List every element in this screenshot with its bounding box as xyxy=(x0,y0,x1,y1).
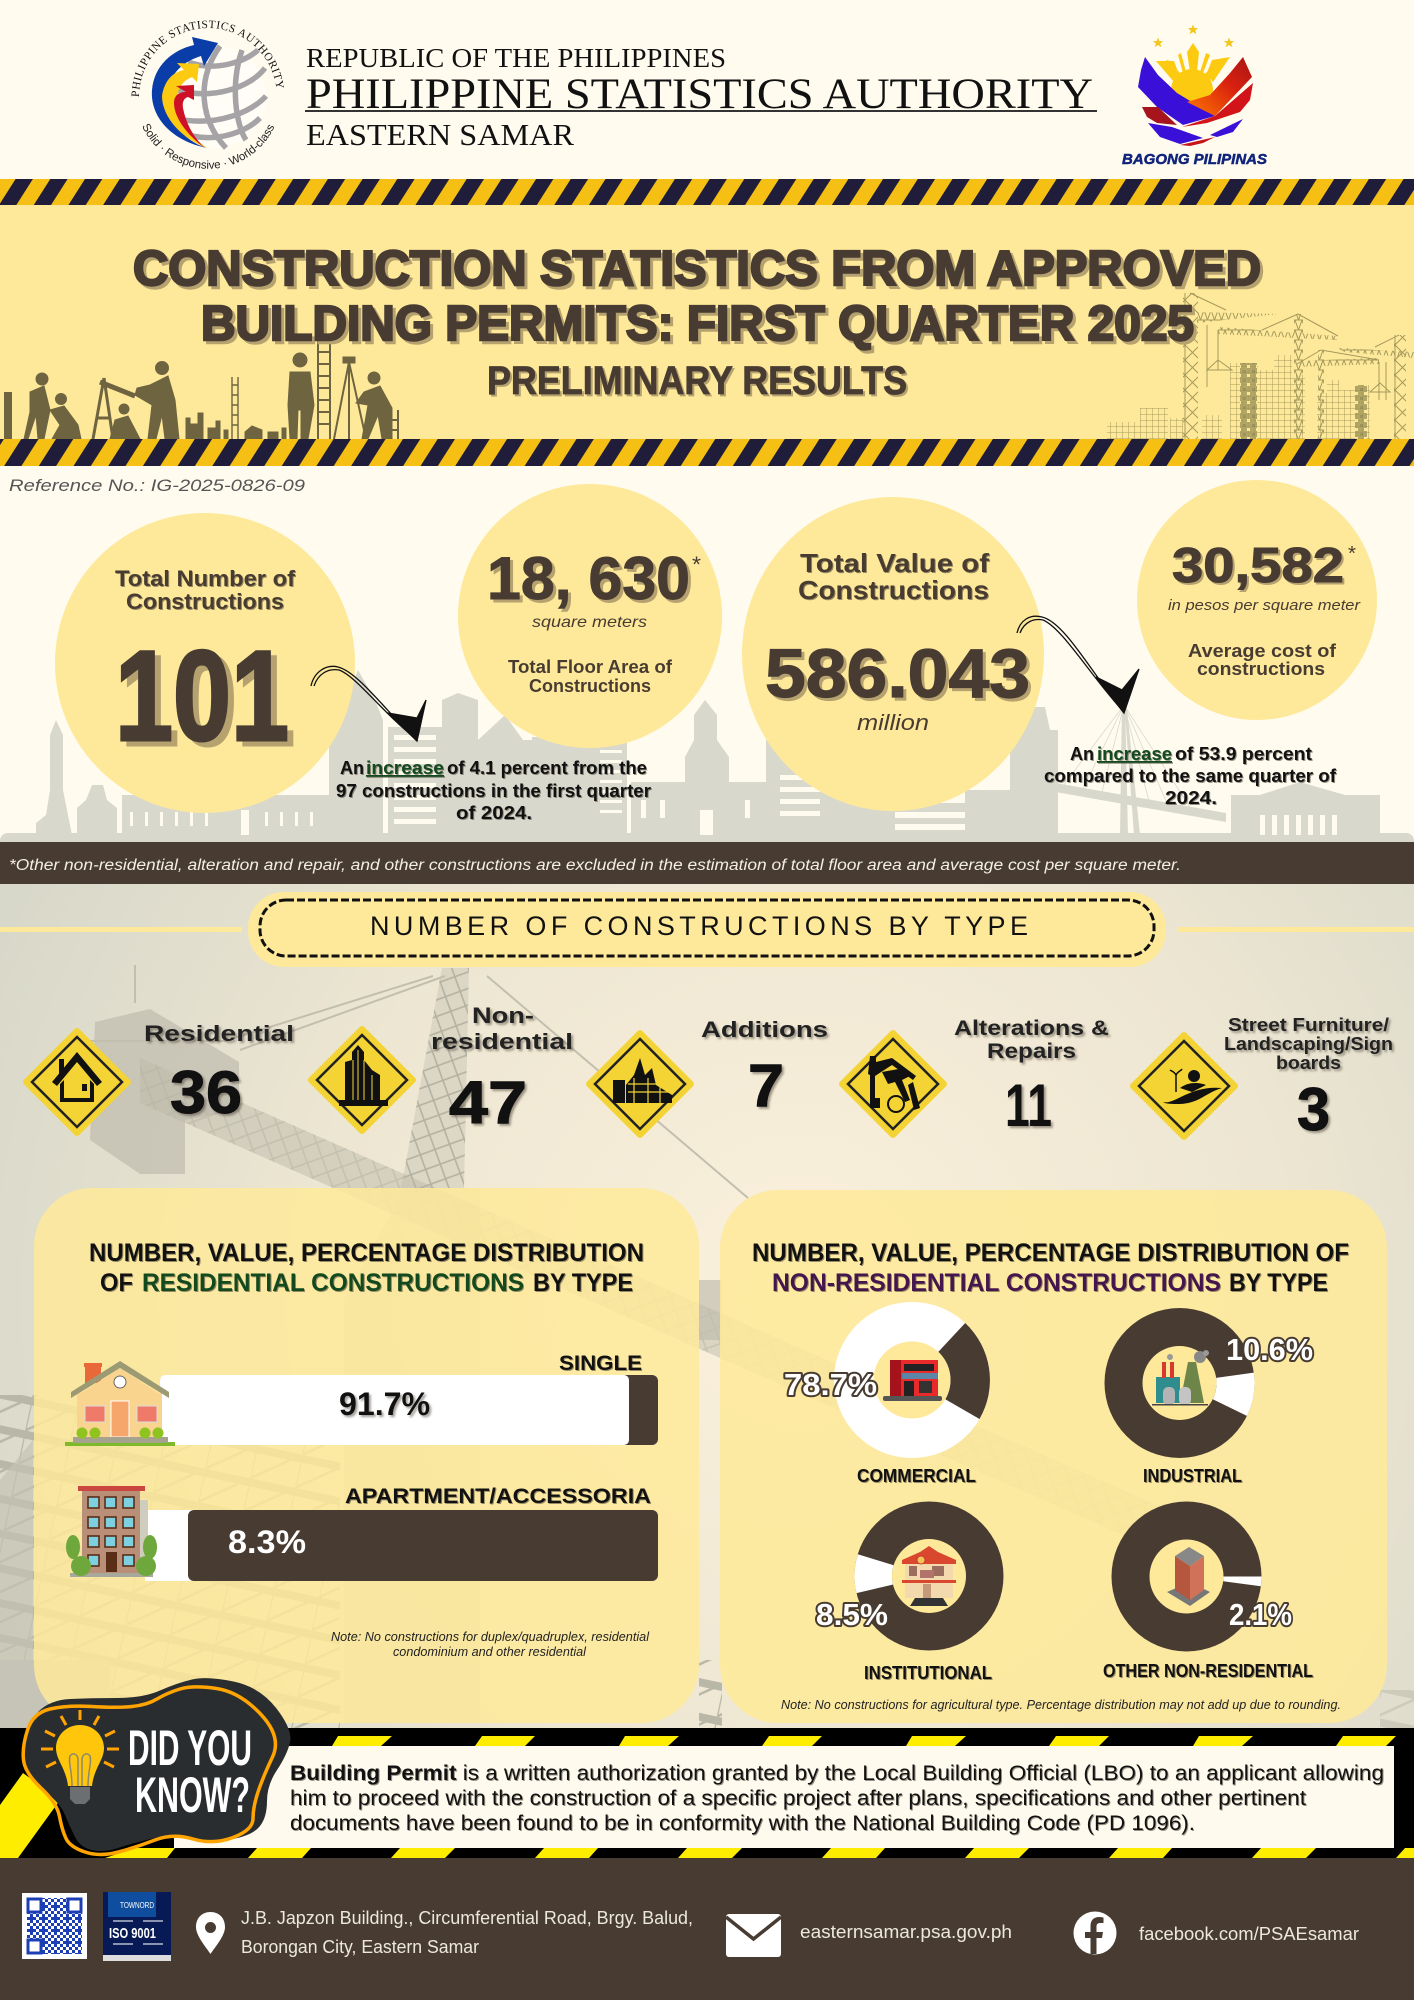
header: agency text xyxy=(305,43,1097,152)
note: residential xyxy=(331,1630,650,1659)
reference number: Reference No.: IG-2025-0826-09 xyxy=(9,476,306,495)
type: non-residential xyxy=(311,1003,573,1136)
ISO 9001 badge: ISO 9001 xyxy=(109,1925,156,1942)
header: agency text: REPUBLIC OF THE PHILIPPINES xyxy=(306,43,726,73)
callout: number increase: 97 constructions in the first quarter xyxy=(336,781,651,801)
stat circle: total number of constructions: Total Number of xyxy=(115,566,296,591)
donut: other non-residential: OTHER NON-RESIDENTIAL xyxy=(1103,1661,1313,1681)
did you know text xyxy=(128,1720,252,1823)
bar: single 91.7 percent xyxy=(160,1375,658,1445)
type: alterations and repairs: Repairs xyxy=(987,1040,1076,1063)
did you know band xyxy=(0,1728,1414,1858)
heading: non-residential: BY TYPE xyxy=(1229,1269,1328,1297)
banner art: tower cranes and buildings xyxy=(1107,293,1414,439)
icon: workers on scaffold diamond xyxy=(589,1033,691,1135)
stat circle: total value of constructions: Total Value of xyxy=(800,548,989,578)
stat circle: total floor area: * xyxy=(692,552,701,577)
icon: apartment building xyxy=(66,1486,157,1577)
donut: institutional: 8.5% xyxy=(816,1597,888,1632)
type: street furniture: Landscaping/Sign xyxy=(1224,1034,1393,1054)
type: alterations and repairs: 11 xyxy=(1005,1072,1052,1139)
hazard tape bottom xyxy=(0,439,1414,466)
heading: residential xyxy=(89,1239,644,1297)
callout: number increase: of 4.1 percent from the xyxy=(447,758,647,778)
banner art: construction workers silhouette xyxy=(4,340,398,439)
header: agency text: EASTERN SAMAR xyxy=(306,117,574,152)
stat circle: average cost: Average cost of xyxy=(1188,641,1337,661)
stat circle: average cost: in pesos per square meter xyxy=(1168,597,1361,614)
donut: commercial xyxy=(784,1302,990,1486)
heading: non-residential: NON-RESIDENTIAL CONSTRUCTIONS xyxy=(772,1269,1221,1297)
type: additions: 7 xyxy=(748,1052,784,1119)
type: non-residential: residential xyxy=(431,1029,573,1054)
skyline windows xyxy=(130,735,1337,835)
type: street furniture: 3 xyxy=(1297,1076,1330,1143)
header: PSA logo xyxy=(131,20,284,169)
stat circle: total value of constructions: Constructions xyxy=(798,575,989,605)
stat circle: total value of constructions: 586.043 xyxy=(765,635,1030,712)
type: additions xyxy=(589,1017,828,1135)
banner subtitle: PRELIMINARY RESULTS xyxy=(487,359,907,403)
icon: factory xyxy=(1152,1350,1209,1406)
donut: other non-residential xyxy=(1103,1502,1313,1681)
header: PSA logo: PHILIPPINE STATISTICS AUTHORITY xyxy=(131,20,284,97)
section heading pill: NUMBER OF CONSTRUCTIONS BY TYPE xyxy=(370,911,1028,941)
donut: industrial xyxy=(1104,1308,1313,1486)
banner: yellow background xyxy=(0,205,1414,439)
donut: other non-residential: 2.1% xyxy=(1229,1597,1292,1632)
note: residential: condominium and other residential xyxy=(393,1645,587,1659)
stat circle: total value of constructions xyxy=(742,497,1044,811)
type: residential xyxy=(26,1021,294,1133)
donut: commercial: 78.7% xyxy=(784,1367,877,1402)
header: PSA logo: Solid · Responsive · World-class xyxy=(142,124,274,169)
definition text: Building Permit is a written authorization granted by the Local Building Official (LBO) to an applicant allowing xyxy=(290,1762,1384,1785)
stat circle: total floor area: 18, 630 xyxy=(487,545,690,612)
callout: number increase: increase xyxy=(366,758,444,778)
stat circle: average cost: * xyxy=(1348,543,1356,565)
heading: residential: OF xyxy=(100,1269,133,1297)
heading: non-residential xyxy=(752,1239,1349,1297)
panel: residential constructions xyxy=(34,1188,699,1723)
bar: apartment 8.3 percent: 8.3% xyxy=(228,1524,306,1560)
stat circle: average cost: constructions xyxy=(1197,659,1325,679)
icon: location pin xyxy=(196,1912,225,1954)
header: Bagong Pilipinas logo: BAGONG PILIPINAS xyxy=(1122,152,1267,168)
heading: non-residential: NUMBER, VALUE, PERCENTAGE DISTRIBUTION OF xyxy=(752,1239,1349,1267)
stat circle: total number of constructions: 101 xyxy=(115,625,289,768)
icon: house repair diamond xyxy=(842,1033,944,1135)
icon: landscaping diamond xyxy=(1133,1035,1235,1137)
callout: value increase: increase xyxy=(1097,744,1172,764)
heading: residential: BY TYPE xyxy=(533,1269,633,1297)
did you know text: DID YOU xyxy=(128,1720,252,1776)
type: street furniture xyxy=(1133,1015,1393,1143)
address: Borongan City, Eastern Samar xyxy=(241,1937,479,1957)
stat circle: total floor area xyxy=(458,484,722,748)
facebook address: facebook.com/PSAEsamar xyxy=(1139,1924,1359,1944)
callout: number increase xyxy=(336,758,651,823)
bar: apartment 8.3 percent xyxy=(145,1510,658,1581)
donut: commercial: COMMERCIAL xyxy=(857,1466,976,1486)
ISO 9001 badge: TOWNORD xyxy=(120,1901,154,1910)
QR code xyxy=(22,1893,87,1959)
icon: light bulb xyxy=(41,1710,119,1804)
hazard stripes xyxy=(0,1736,1414,1858)
donut: industrial: INDUSTRIAL xyxy=(1143,1466,1242,1486)
skyline bridge cables xyxy=(1060,705,1195,815)
ISO 9001 badge xyxy=(103,1892,171,1961)
header: Bagong Pilipinas logo xyxy=(1122,24,1267,168)
donut: institutional: INSTITUTIONAL xyxy=(864,1663,992,1683)
callout: value increase: of 53.9 percent xyxy=(1175,744,1312,764)
note: residential: Note: No constructions for duplex/quadruplex, residential xyxy=(331,1630,650,1644)
stat circle: total number of constructions: Constructions xyxy=(126,589,284,614)
type: alterations and repairs: Alterations & xyxy=(954,1017,1109,1040)
definition text: documents have been found to be in conformity with the National Building Code (PD 1096). xyxy=(290,1812,1195,1835)
banner title: BUILDING PERMITS: FIRST QUARTER 2025 xyxy=(201,297,1194,351)
heading: residential: NUMBER, VALUE, PERCENTAGE DISTRIBUTION xyxy=(89,1239,644,1267)
footnote band xyxy=(0,842,1414,884)
hazard tape top xyxy=(0,179,1414,205)
type: alterations and repairs xyxy=(842,1017,1109,1139)
type: non-residential: Non- xyxy=(472,1003,534,1028)
section heading pill xyxy=(0,892,1414,967)
header: agency text: PHILIPPINE STATISTICS AUTHORITY xyxy=(306,71,1093,118)
banner title xyxy=(133,242,1261,351)
label: single: SINGLE xyxy=(559,1352,642,1375)
icon: facebook xyxy=(1074,1912,1116,1954)
definition text: him to proceed with the construction of a specific project after plans, specifications and other pertinent xyxy=(290,1787,1306,1810)
icon: skyscraper diamond xyxy=(311,1029,413,1131)
callout: value increase: 2024. xyxy=(1165,788,1217,808)
address: J.B. Japzon Building., Circumferential Road, Brgy. Balud, xyxy=(241,1908,693,1928)
callout: value increase xyxy=(1044,744,1337,808)
icon: house diamond xyxy=(26,1031,128,1133)
label: apartment: APARTMENT/ACCESSORIA xyxy=(345,1485,651,1508)
callout: value increase: compared to the same quarter of xyxy=(1044,766,1337,786)
text panel xyxy=(174,1746,1394,1848)
type: residential: 36 xyxy=(170,1059,242,1126)
address xyxy=(241,1908,693,1957)
footnote band: *Other non-residential, alteration and repair, and other constructions are excluded in the estimation of total floor area and average cost per square meter. xyxy=(9,857,1181,874)
icon: tower block xyxy=(1167,1547,1210,1606)
arrow: total value increase xyxy=(1017,616,1139,713)
stat circle: total floor area: Total Floor Area of xyxy=(508,657,673,677)
panel: non-residential constructions xyxy=(720,1190,1387,1723)
type: non-residential: 47 xyxy=(449,1069,527,1136)
donut: industrial: 10.6% xyxy=(1226,1332,1313,1367)
type: street furniture: boards xyxy=(1276,1053,1341,1073)
icon: shop xyxy=(883,1360,942,1401)
note: non-residential: Note: No constructions for agricultural type. Percentage distribution may not add up due to rounding. xyxy=(781,1698,1341,1712)
icon: single house xyxy=(65,1361,175,1446)
bar: single 91.7 percent: 91.7% xyxy=(339,1386,430,1422)
footer xyxy=(0,1858,1414,2000)
lower section background xyxy=(0,884,1414,1728)
stat circle: total number of constructions xyxy=(55,513,355,813)
type: additions: Additions xyxy=(701,1017,828,1042)
website: easternsamar.psa.gov.ph xyxy=(800,1922,1012,1942)
did you know badge xyxy=(23,1678,290,1854)
background art: tower crane xyxy=(0,965,1414,1728)
stat circle: total floor area: Constructions xyxy=(529,676,651,696)
callout: number increase: of 2024. xyxy=(456,803,532,823)
heading: residential: RESIDENTIAL CONSTRUCTIONS xyxy=(142,1269,524,1297)
skyline silhouette xyxy=(0,670,1414,848)
did you know text: KNOW? xyxy=(135,1767,250,1823)
definition text xyxy=(290,1762,1384,1835)
arrow: total number increase xyxy=(311,666,426,741)
donut: institutional xyxy=(816,1502,1004,1683)
stat circle: total floor area: square meters xyxy=(532,614,647,631)
banner title: CONSTRUCTION STATISTICS FROM APPROVED xyxy=(133,242,1261,296)
callout: value increase: An xyxy=(1070,744,1094,764)
icon: school building xyxy=(902,1546,956,1606)
stat circle: total value of constructions: million xyxy=(857,710,929,735)
type: residential: Residential xyxy=(144,1021,294,1046)
icon: mail xyxy=(726,1914,781,1957)
stat circle: average cost xyxy=(1137,480,1377,720)
type: street furniture: Street Furniture/ xyxy=(1228,1015,1389,1035)
callout: number increase: An xyxy=(340,758,364,778)
stat circle: average cost: 30,582 xyxy=(1172,539,1344,593)
